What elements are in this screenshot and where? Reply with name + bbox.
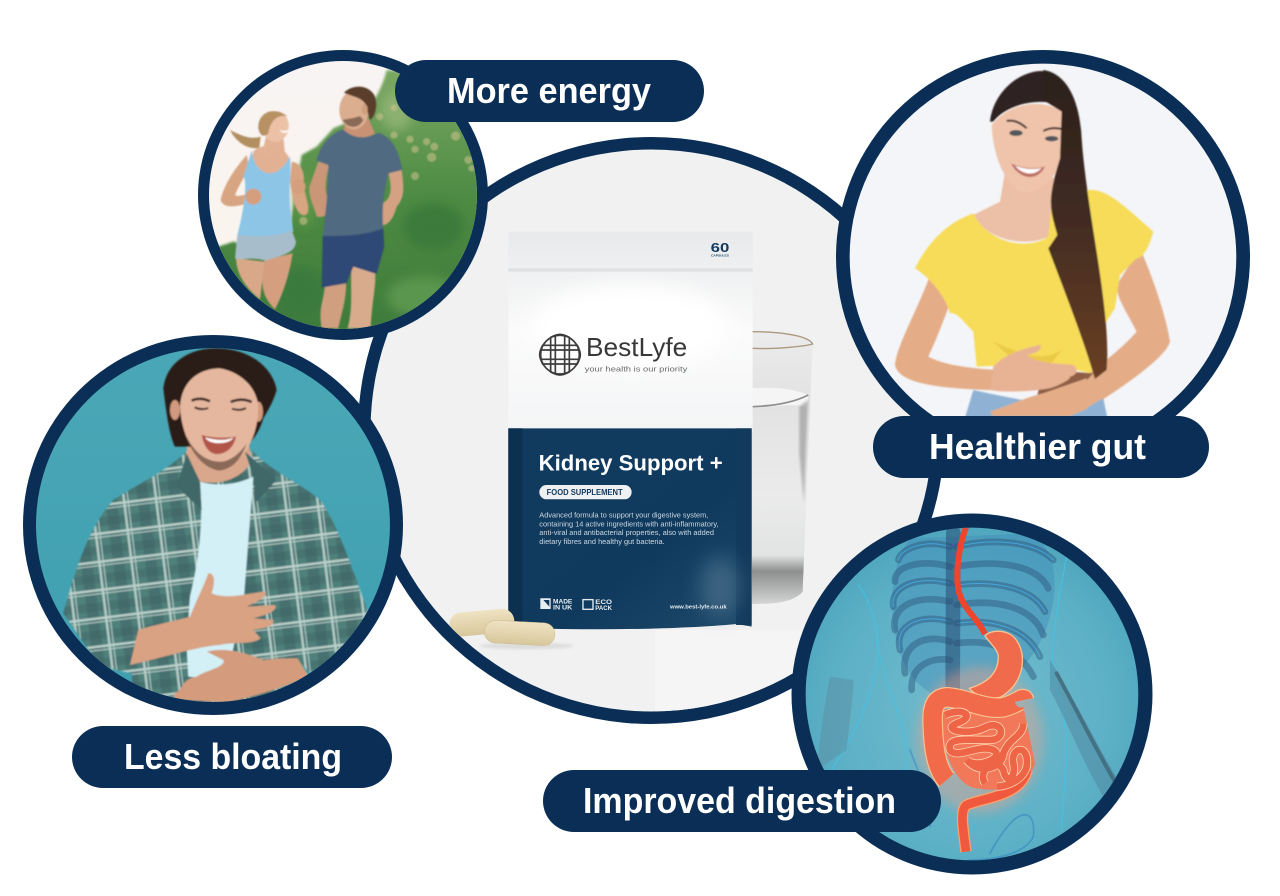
panel: smiling woman circle (836, 50, 1250, 416)
text: description: dietary fibres and healthy gut bacteria. (539, 537, 665, 546)
text: description: anti-viral and antibacterial properties, also with added (539, 528, 714, 537)
badge: made in UK: MADE (553, 599, 572, 605)
pill label: Less bloating (72, 726, 392, 788)
text: description: Advanced formula to support your digestive system, (539, 510, 708, 519)
pill label: More energy (395, 60, 704, 122)
woman runner (221, 110, 308, 309)
panel: central product circle (350, 130, 960, 730)
label: food supplement (539, 485, 632, 499)
text: brand name: BestLyfe (586, 332, 687, 362)
text: brand tagline: your health is our priority (585, 365, 688, 374)
icon: capsules (448, 608, 573, 649)
text: product name: Kidney Support + (539, 451, 723, 476)
product pouch (508, 232, 753, 629)
pill label: More energy: More energy (447, 70, 651, 111)
icon: BestLyfe knot logo (540, 334, 580, 375)
body outline (817, 557, 1118, 860)
woman in yellow top (895, 70, 1170, 418)
pill label: Healthier gut: Healthier gut (929, 426, 1146, 467)
badge: eco pack: ECO (595, 600, 612, 606)
text: website: www.best-lyfe.co.uk (669, 605, 728, 611)
icon: water glass (752, 332, 813, 604)
badge: eco pack (583, 600, 613, 612)
panel: runners circle (198, 50, 490, 340)
pill label: Healthier gut (873, 416, 1209, 478)
man with plaid shirt (63, 348, 368, 703)
text: capsule count: 60 (711, 240, 729, 255)
panel: digestive system circle (792, 514, 1152, 874)
pill label: Improved digestion (543, 770, 941, 832)
text: description (539, 510, 719, 546)
badge: made in UK: IN UK (553, 605, 573, 611)
text: capsule count (711, 243, 729, 256)
text: description: containing 14 active ingredients with anti-inflammatory, (539, 519, 719, 528)
label: food supplement: FOOD SUPPLEMENT (547, 487, 623, 497)
digestive organs (917, 527, 1043, 852)
badge: made in UK (540, 598, 572, 610)
trees background (219, 68, 477, 329)
text: capsule count: CAPSULES (711, 253, 729, 257)
rib cage (892, 533, 1055, 700)
man runner (309, 87, 403, 328)
pill label: Improved digestion: Improved digestion (583, 780, 896, 821)
panel: laughing man circle (23, 335, 403, 715)
badge: eco pack: PACK (595, 606, 613, 612)
pill label: Less bloating: Less bloating (124, 736, 342, 777)
